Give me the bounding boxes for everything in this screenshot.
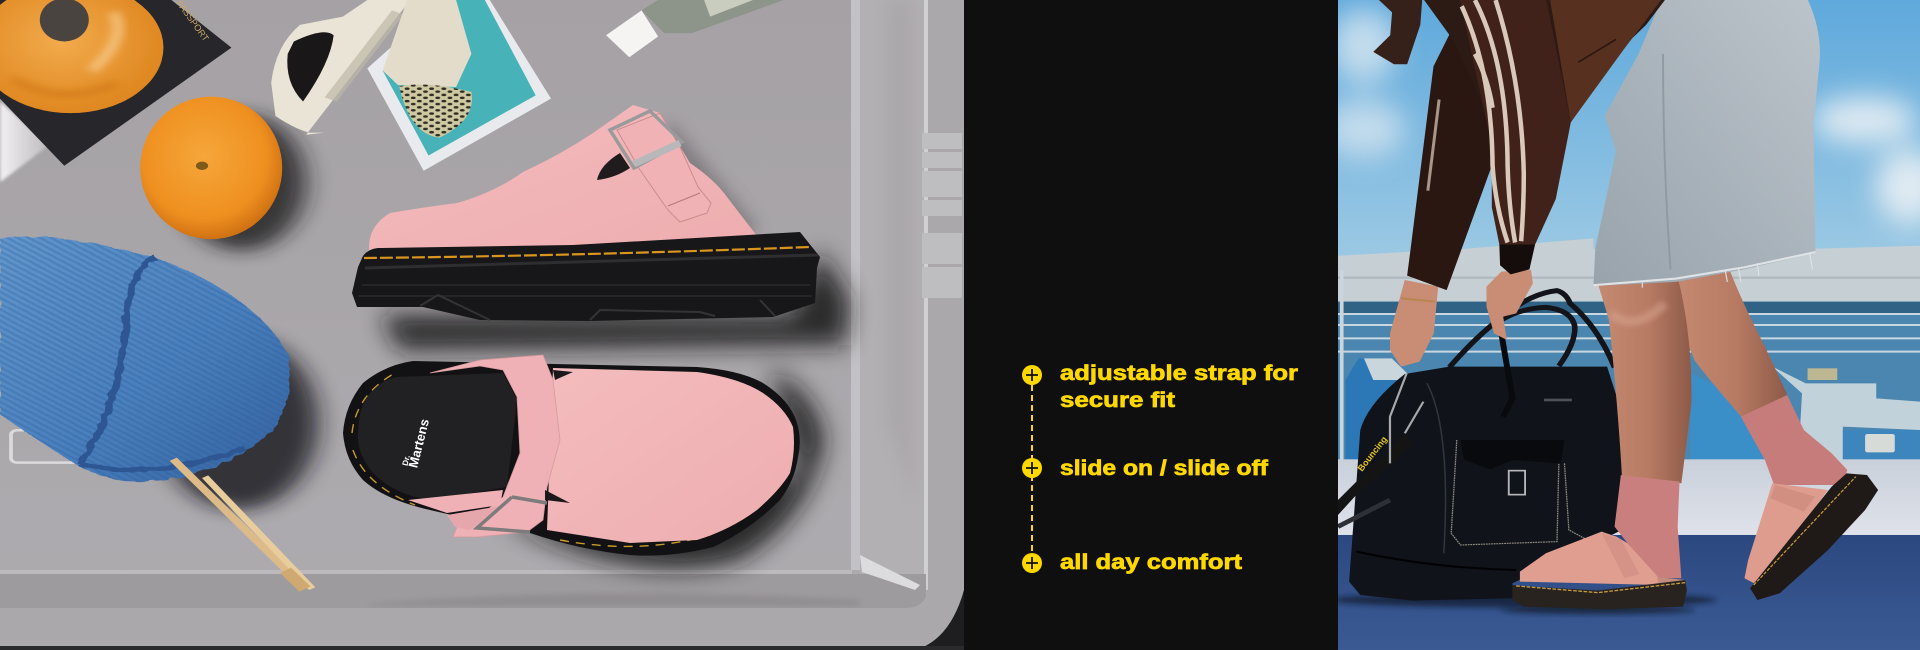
insole [358,373,517,500]
insole logo: Dr. [401,454,412,467]
cuff [1499,245,1535,274]
bottom clog shadow [500,370,825,569]
jacket [1373,0,1665,290]
bag body [1349,367,1622,601]
tray rim [0,0,964,650]
heel opening [597,153,630,180]
buckle [610,111,682,168]
glass rails [1338,314,1920,352]
clips [1390,373,1423,463]
tray side wall [851,0,929,608]
icon: plus [1022,365,1042,385]
pocket stitching [1451,440,1559,545]
label: slide on / slide off [1060,456,1269,480]
welt and outsole [352,232,820,321]
front handle strap [1501,333,1512,417]
sunglasses [271,0,410,135]
tray bottom channel [0,555,926,608]
outsole [343,361,800,556]
front sleeve [1460,0,1571,245]
label: all day comfort [1060,550,1242,574]
insole logo: Martens [405,417,432,469]
yarn ball [0,236,290,482]
clog shadow on carpet [1501,606,1694,614]
buckle strap [617,113,711,222]
bag logo [1544,399,1572,401]
label: adjustable strap for [1060,361,1299,385]
luggage strap [1338,433,1414,515]
jet bridge [1772,367,1920,460]
right hand [1486,270,1533,340]
upper [547,368,794,543]
top clog shadow [380,120,850,350]
icon: plus [1022,553,1042,573]
bagel [0,0,163,113]
top clog [352,105,820,321]
knitting needles [173,459,312,592]
front sock [1615,475,1681,578]
tray handle outline [11,430,84,463]
parked van [1865,434,1895,452]
back leg [1674,270,1788,417]
apron [1338,459,1920,536]
buckle [1509,471,1525,495]
panel: airport lifestyle photo [1322,0,1920,650]
sky [1338,0,1920,256]
hair [1373,0,1422,64]
buckle [477,497,547,532]
bag handles [1449,291,1615,367]
frayed hem [1642,254,1812,288]
passport [0,0,231,166]
bottle [606,0,784,57]
jacket body [1424,0,1665,124]
strap notches [545,370,573,503]
strap lettering: Bouncing [1356,434,1389,473]
feature: all day comfort [1022,550,1242,574]
left hand [1390,280,1438,367]
tray rim ridges [922,133,962,298]
front clog [1512,532,1687,609]
carpet [1338,535,1920,650]
clouds [1322,8,1920,224]
dashed connector line [1031,385,1033,556]
feature: slide on slide off [1022,456,1269,480]
panel: black feature list [964,0,1338,650]
lamp pole [1340,270,1344,460]
panel: flat-lay tray photo [0,0,964,650]
duffel bag [1338,291,1622,601]
clog upper [369,105,757,250]
terminal roof [1330,238,1920,307]
orange [140,97,306,251]
back clog [1744,473,1878,600]
back sock [1741,395,1847,485]
tray glare [0,102,49,182]
terminal glass [1338,302,1920,462]
sleeve stripes [1462,0,1524,242]
tray floor [0,0,964,650]
front leg [1598,277,1691,483]
bottom clog [343,355,800,556]
feature: adjustable strap [1022,361,1299,412]
polaroid [367,0,551,171]
yellow stitch [364,247,810,258]
terminal buildings [1345,358,1431,460]
skirt [1593,0,1820,288]
pocket flap [1460,440,1564,469]
label: secure fit [1060,388,1175,412]
strap [430,355,560,537]
duffel shadow [1331,593,1717,607]
icon: plus [1022,458,1042,478]
back sleeve [1407,25,1496,290]
yarn shadow [159,336,318,510]
